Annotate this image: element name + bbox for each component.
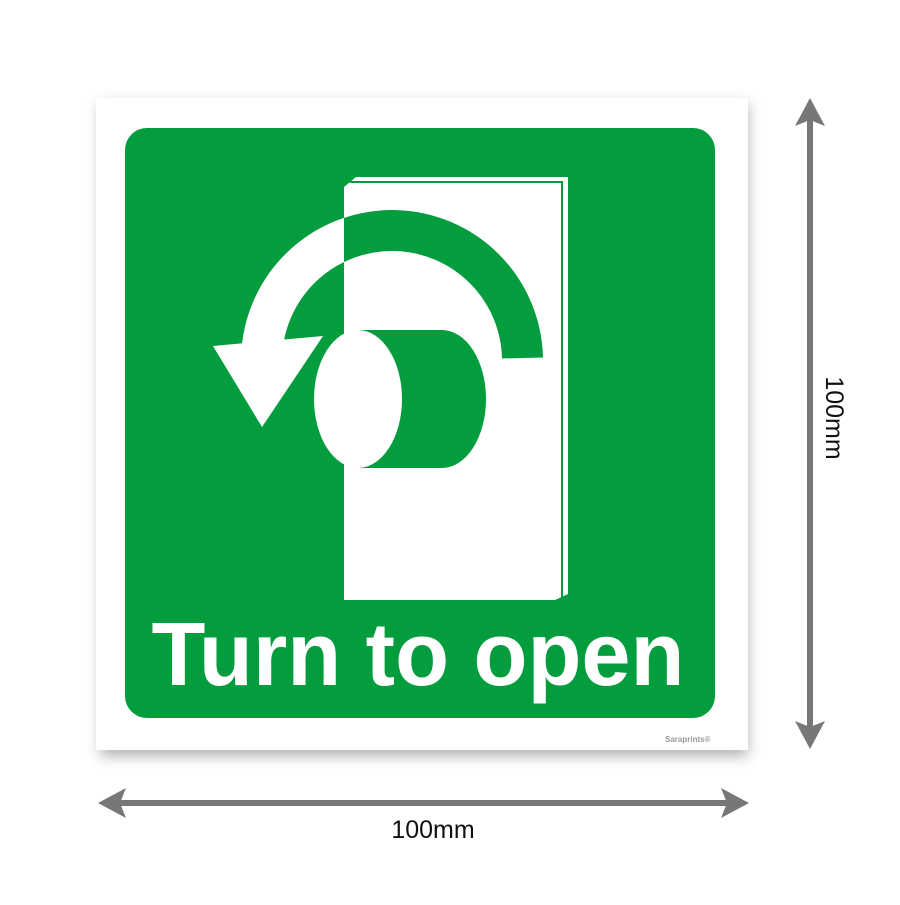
sign card: [96, 98, 748, 756]
green panel: [125, 128, 715, 718]
icon: door with turning knob: [213, 177, 568, 600]
height arrow: [795, 98, 825, 749]
turning arrow: [213, 231, 522, 427]
cylinder knob: [358, 330, 486, 468]
width arrow: [98, 788, 749, 818]
height label: 100mm: [820, 376, 848, 460]
sign text: Turn to open: [152, 605, 684, 705]
width label: 100mm: [391, 816, 475, 844]
brand mark: Saraprints®: [665, 735, 711, 744]
